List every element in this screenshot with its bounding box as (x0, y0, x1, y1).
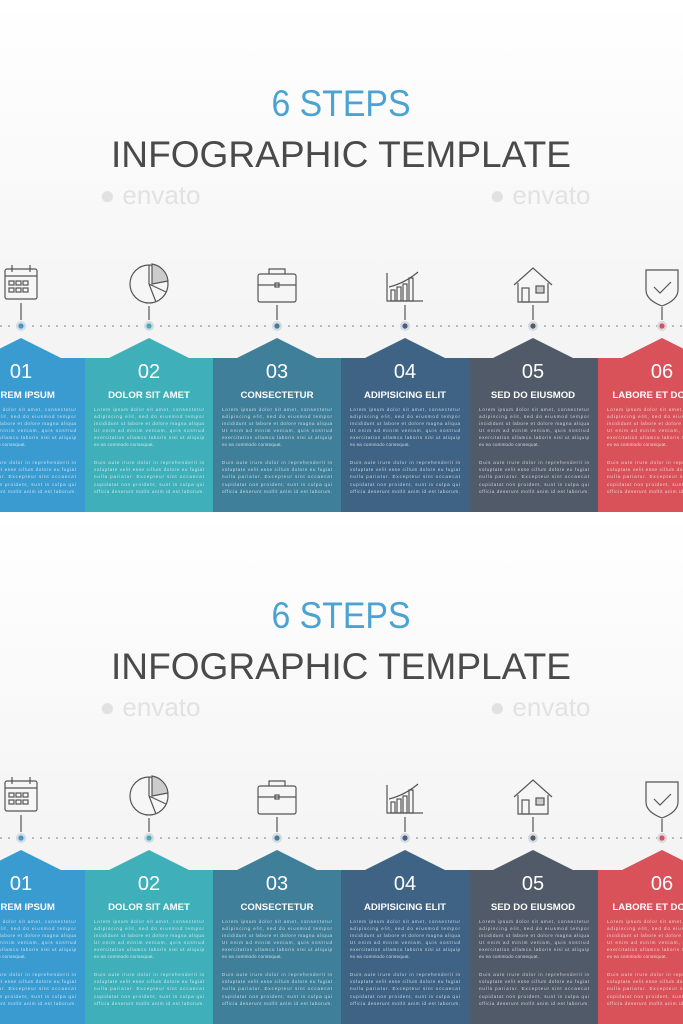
panel: step 05: cupidatat non proident, sunt in culpa qui (479, 482, 589, 487)
panel: step 05: Ut enim ad minim veniam, quis nostrud (479, 428, 589, 433)
icon: shield (646, 782, 678, 832)
panel: step 03: adipiscing elit, sed do eiusmod tempor (222, 414, 332, 419)
panel: step 02: ex ea commodo consequat. (94, 442, 154, 447)
panel: step 04: officia deserunt mollit anim id est laborum. (350, 1001, 460, 1006)
panel: step 04: voluptate velit esse cillum dolore eu fugiat (350, 467, 461, 472)
panel: step 03: nulla pariatur. Excepteur sint occaecat (222, 474, 333, 479)
panel: step 05: officia deserunt mollit anim id est laborum. (479, 1001, 589, 1006)
title: infographic template: INFOGRAPHIC TEMPLATE (111, 646, 571, 687)
panel: step 02: adipiscing elit, sed do eiusmod tempor (94, 926, 204, 931)
panel: step 03 (213, 338, 341, 512)
panel: step 02: voluptate velit esse cillum dolore eu fugiat (94, 979, 205, 984)
panel: step 04: ADIPISICING ELIT (364, 390, 446, 401)
half: top infographic (0, 0, 683, 512)
timeline dotted line (0, 325, 683, 327)
title: 6 steps: 6 STEPS (272, 83, 410, 124)
icon: calendar (5, 777, 37, 832)
icon: pie chart (130, 776, 168, 832)
panel: step 02: DOLOR SIT AMET (108, 390, 190, 401)
panel: step 01: 01 (10, 361, 32, 383)
panel: step 03 (213, 850, 341, 1024)
panel: step 02: Lorem ipsum dolor sit amet, consectetur (94, 919, 204, 924)
panel: step 02 (85, 850, 213, 1024)
panel: step 06: ex ea commodo consequat. (607, 954, 667, 959)
panel: step 03: exercitation ullamco laboris nisi ut aliquip (222, 947, 332, 952)
panel: step 04: exercitation ullamco laboris nisi ut aliquip (350, 435, 460, 440)
panel: step 06: 06 (651, 361, 673, 383)
panel: step 06 (598, 338, 683, 512)
panel: step 03: Duis aute irure dolor in reprehenderit in (222, 972, 332, 977)
panel: step 04: 04 (394, 361, 416, 383)
panel: step 05: voluptate velit esse cillum dolore eu fugiat (479, 979, 590, 984)
icon: house (514, 780, 552, 832)
panel: step 03: CONSECTETUR (240, 390, 314, 401)
panel: step 05: nulla pariatur. Excepteur sint occaecat (479, 986, 590, 991)
panel: step 06 (598, 850, 683, 1024)
half: bottom infographic (repeat) (0, 512, 683, 1024)
panel: step 03: exercitation ullamco laboris nisi ut aliquip (222, 435, 332, 440)
panel: step 02: Ut enim ad minim veniam, quis nostrud (94, 940, 204, 945)
panel: step 02: 02 (138, 361, 160, 383)
panel: step 03: 03 (266, 361, 288, 383)
icon: pie chart (130, 264, 168, 320)
panel: step 01 (0, 850, 85, 1024)
panel: step 06: 06 (651, 873, 673, 895)
panel: step 05 (470, 850, 598, 1024)
panel: step 04 (341, 850, 470, 1024)
panel: step 01: 01 (10, 873, 32, 895)
panel: step 04: Lorem ipsum dolor sit amet, consectetur (350, 919, 460, 924)
panel: step 02: adipiscing elit, sed do eiusmod tempor (94, 414, 204, 419)
panel: step 02: DOLOR SIT AMET (108, 902, 190, 913)
panel: step 03: ex ea commodo consequat. (222, 954, 282, 959)
panel: step 02: cupidatat non proident, sunt in culpa qui (94, 994, 204, 999)
panel: step 04: nulla pariatur. Excepteur sint occaecat (350, 986, 461, 991)
panel: step 05: Lorem ipsum dolor sit amet, consectetur (479, 407, 589, 412)
panel: step 05: SED DO EIUSMOD (491, 390, 575, 401)
panel: step 06: ex ea commodo consequat. (607, 442, 667, 447)
panel: step 02: Duis aute irure dolor in reprehenderit in (94, 972, 204, 977)
panel: step 02: voluptate velit esse cillum dolore eu fugiat (94, 467, 205, 472)
panel: step 04: adipiscing elit, sed do eiusmod tempor (350, 414, 460, 419)
panel: step 03: incididunt ut labore et dolore magna aliqua (222, 933, 332, 938)
panel: step 05 (470, 338, 598, 512)
panel: step 03: Lorem ipsum dolor sit amet, consectetur (222, 407, 332, 412)
panel: step 05: 05 (522, 361, 544, 383)
panel: step 04: Duis aute irure dolor in reprehenderit in (350, 460, 460, 465)
panel: step 03: nulla pariatur. Excepteur sint occaecat (222, 986, 333, 991)
title: infographic template: INFOGRAPHIC TEMPLATE (111, 134, 571, 175)
watermark right: ● envato (490, 692, 590, 722)
panel: step 03: adipiscing elit, sed do eiusmod tempor (222, 926, 332, 931)
timeline dotted line (0, 837, 683, 839)
panel: step 04: adipiscing elit, sed do eiusmod tempor (350, 926, 460, 931)
panel: step 03: 03 (266, 873, 288, 895)
panel: step 01 (0, 338, 85, 512)
panel: step 05: officia deserunt mollit anim id est laborum. (479, 489, 589, 494)
panel: step 03: Ut enim ad minim veniam, quis nostrud (222, 428, 332, 433)
panel: step 02: nulla pariatur. Excepteur sint occaecat (94, 986, 205, 991)
panel: step 05: SED DO EIUSMOD (491, 902, 575, 913)
panel: step 03: cupidatat non proident, sunt in culpa qui (222, 482, 332, 487)
panel: step 02: Duis aute irure dolor in reprehenderit in (94, 460, 204, 465)
panel: step 05: 05 (522, 873, 544, 895)
watermark left: ● envato (100, 692, 200, 722)
panel: step 02: incididunt ut labore et dolore magna aliqua (94, 933, 204, 938)
panel: step 03: cupidatat non proident, sunt in culpa qui (222, 994, 332, 999)
panel: step 05: Duis aute irure dolor in reprehenderit in (479, 460, 589, 465)
panel: step 04: Ut enim ad minim veniam, quis nostrud (350, 428, 460, 433)
panel: step 03: Lorem ipsum dolor sit amet, consectetur (222, 919, 332, 924)
panel: step 03: CONSECTETUR (240, 902, 314, 913)
icon: shield (646, 270, 678, 320)
panel: step 05: adipiscing elit, sed do eiusmod tempor (479, 926, 589, 931)
panel: step 05: Ut enim ad minim veniam, quis nostrud (479, 940, 589, 945)
icon: briefcase (258, 781, 296, 832)
icon: calendar (5, 265, 37, 320)
panel: step 04: ex ea commodo consequat. (350, 954, 410, 959)
icon: growth chart (387, 784, 423, 832)
panel: step 03: Ut enim ad minim veniam, quis nostrud (222, 940, 332, 945)
panel: step 05: incididunt ut labore et dolore magna aliqua (479, 933, 589, 938)
panel: step 05: Duis aute irure dolor in reprehenderit in (479, 972, 589, 977)
panel: step 02: nulla pariatur. Excepteur sint occaecat (94, 474, 205, 479)
panel: step 04: exercitation ullamco laboris nisi ut aliquip (350, 947, 460, 952)
panel: step 05: Lorem ipsum dolor sit amet, consectetur (479, 919, 589, 924)
icon: growth chart (387, 272, 423, 320)
panel: step 04: voluptate velit esse cillum dolore eu fugiat (350, 979, 461, 984)
panel: step 03: officia deserunt mollit anim id est laborum. (222, 489, 332, 494)
panel: step 02: 02 (138, 873, 160, 895)
panel: step 03: Duis aute irure dolor in reprehenderit in (222, 460, 332, 465)
panel: step 05: exercitation ullamco laboris nisi ut aliquip (479, 947, 589, 952)
panel: step 04: officia deserunt mollit anim id est laborum. (350, 489, 460, 494)
icon: house (514, 268, 552, 320)
panel: step 05: ex ea commodo consequat. (479, 442, 539, 447)
panel: step 03: incididunt ut labore et dolore magna aliqua (222, 421, 332, 426)
panel: step 02: incididunt ut labore et dolore magna aliqua (94, 421, 204, 426)
panel: step 02: officia deserunt mollit anim id est laborum. (94, 489, 204, 494)
panel: step 05: adipiscing elit, sed do eiusmod tempor (479, 414, 589, 419)
panel: step 04: 04 (394, 873, 416, 895)
watermark right: ● envato (490, 180, 590, 210)
panel: step 04: ex ea commodo consequat. (350, 442, 410, 447)
icon: briefcase (258, 269, 296, 320)
panel: step 04: ADIPISICING ELIT (364, 902, 446, 913)
panel: step 02: exercitation ullamco laboris nisi ut aliquip (94, 947, 204, 952)
panel: step 04: cupidatat non proident, sunt in culpa qui (350, 482, 460, 487)
panel: step 03: officia deserunt mollit anim id est laborum. (222, 1001, 332, 1006)
title: 6 steps: 6 STEPS (272, 595, 410, 636)
panel: step 04: Lorem ipsum dolor sit amet, consectetur (350, 407, 460, 412)
panel: step 04: nulla pariatur. Excepteur sint occaecat (350, 474, 461, 479)
panel: step 05: exercitation ullamco laboris nisi ut aliquip (479, 435, 589, 440)
panel: step 05: voluptate velit esse cillum dolore eu fugiat (479, 467, 590, 472)
panel: step 03: voluptate velit esse cillum dolore eu fugiat (222, 467, 333, 472)
panel: step 04: Ut enim ad minim veniam, quis nostrud (350, 940, 460, 945)
panel: step 03: voluptate velit esse cillum dolore eu fugiat (222, 979, 333, 984)
panel: step 05: incididunt ut labore et dolore magna aliqua (479, 421, 589, 426)
panel: step 02: ex ea commodo consequat. (94, 954, 154, 959)
watermark left: ● envato (100, 180, 200, 210)
panel: step 04: Duis aute irure dolor in reprehenderit in (350, 972, 460, 977)
panel: step 04: incididunt ut labore et dolore magna aliqua (350, 421, 460, 426)
panel: step 02: officia deserunt mollit anim id est laborum. (94, 1001, 204, 1006)
panel: step 04 (341, 338, 470, 512)
panel: step 04: incididunt ut labore et dolore magna aliqua (350, 933, 460, 938)
panel: step 02: cupidatat non proident, sunt in culpa qui (94, 482, 204, 487)
panel: step 02 (85, 338, 213, 512)
timeline dots (16, 321, 667, 331)
panel: step 04: cupidatat non proident, sunt in culpa qui (350, 994, 460, 999)
panel: step 03: ex ea commodo consequat. (222, 442, 282, 447)
panel: step 02: exercitation ullamco laboris nisi ut aliquip (94, 435, 204, 440)
panel: step 02: Ut enim ad minim veniam, quis nostrud (94, 428, 204, 433)
panel: step 05: nulla pariatur. Excepteur sint occaecat (479, 474, 590, 479)
timeline dots (16, 833, 667, 843)
panel: step 05: ex ea commodo consequat. (479, 954, 539, 959)
panel: step 02: Lorem ipsum dolor sit amet, consectetur (94, 407, 204, 412)
panel: step 05: cupidatat non proident, sunt in culpa qui (479, 994, 589, 999)
